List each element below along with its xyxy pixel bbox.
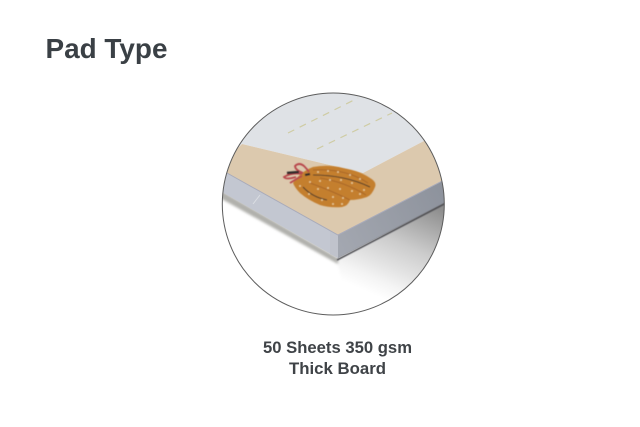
caption line 2: Thick Board — [289, 360, 386, 378]
white fade at shadow start — [300, 258, 352, 320]
caption line 1: 50 Sheets 350 gsm — [263, 339, 412, 357]
caption — [263, 339, 412, 378]
product image circle — [222, 92, 445, 316]
pad cover paper — [238, 94, 424, 173]
tan band — [227, 141, 442, 234]
left side of stack — [224, 174, 330, 254]
circle outline — [222, 93, 444, 315]
pumpkin dots — [299, 170, 365, 205]
dark right base edge — [337, 201, 450, 260]
stitched lines — [288, 98, 392, 149]
icon: pumpkin — [284, 164, 375, 207]
right side of stack — [338, 182, 444, 258]
ribbon bow — [284, 164, 309, 183]
title: Pad Type — [46, 33, 168, 64]
front corner sliver — [330, 254, 337, 258]
left floor shadow — [220, 190, 338, 264]
pumpkin ribs — [303, 175, 370, 200]
ribbon knot — [287, 172, 310, 175]
top edge lines — [227, 173, 450, 235]
crease on left side — [253, 195, 260, 204]
right floor shadow — [339, 203, 444, 292]
